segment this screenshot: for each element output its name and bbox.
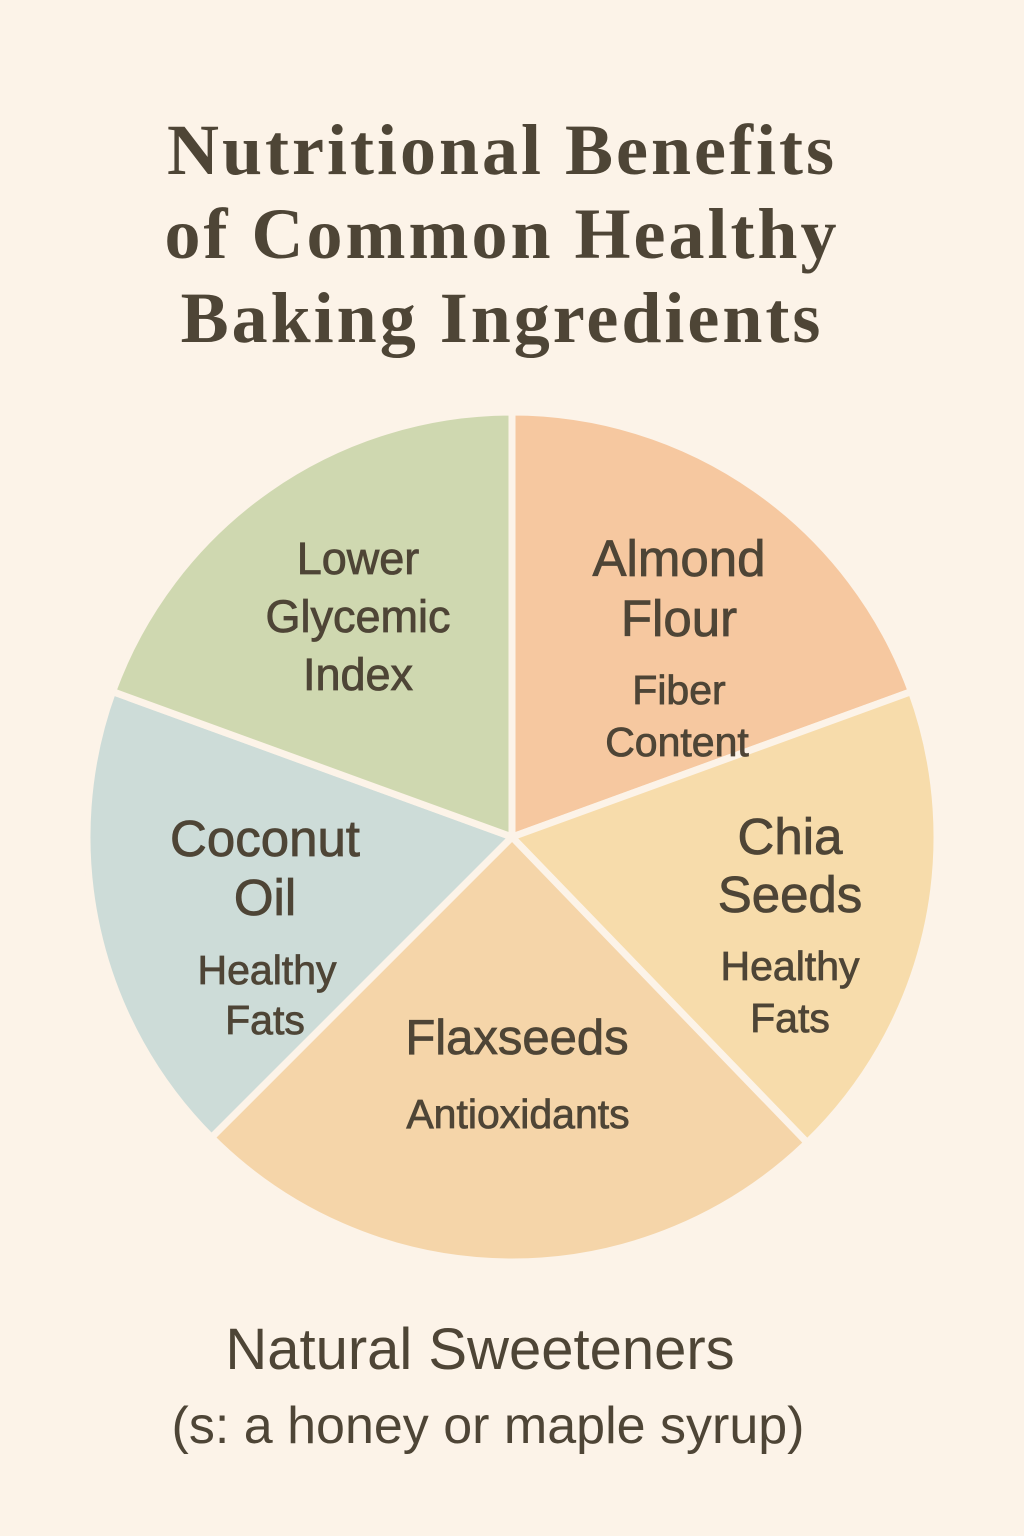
label: coconut oil: Coconut [170,810,360,867]
label: lower glycemic index: Glycemic [265,591,451,642]
label: coconut oil: Healthy [197,947,337,993]
label: chia seeds: Fats [750,995,830,1041]
title: of Common Healthy [165,194,839,274]
slice: flaxseeds [212,837,807,1262]
label: coconut oil: Fats [225,997,305,1043]
label: almond flour [593,530,765,765]
label: lower glycemic index [265,533,451,700]
label: chia seeds: Healthy [720,943,860,989]
label: almond flour: Content [605,719,749,765]
label: coconut oil: Oil [234,869,296,926]
slice: lower glycemic index [113,412,512,837]
label: almond flour: Flour [621,590,737,647]
label: flaxseeds: Flaxseeds [405,1011,629,1065]
label: chia seeds: Chia [738,808,843,865]
slice: coconut oil [87,692,512,1138]
title: Nutritional Benefits [167,110,837,190]
title: Baking Ingredients [181,278,823,358]
label: chia seeds: Seeds [718,866,862,923]
footer note: (s: a honey or maple syrup) [172,1397,804,1455]
title [165,110,839,358]
slice: almond flour [512,412,911,837]
label: lower glycemic index: Index [303,649,414,700]
label: almond flour: Almond [593,530,765,587]
label: chia seeds [718,808,862,1041]
footer: natural sweeteners: Natural Sweeteners [225,1317,735,1382]
label: flaxseeds [405,1011,630,1137]
label: almond flour: Fiber [632,667,726,713]
label: flaxseeds: Antioxidants [406,1091,630,1137]
label: coconut oil [170,810,360,1043]
label: lower glycemic index: Lower [297,533,419,584]
slice: chia seeds [512,692,937,1143]
